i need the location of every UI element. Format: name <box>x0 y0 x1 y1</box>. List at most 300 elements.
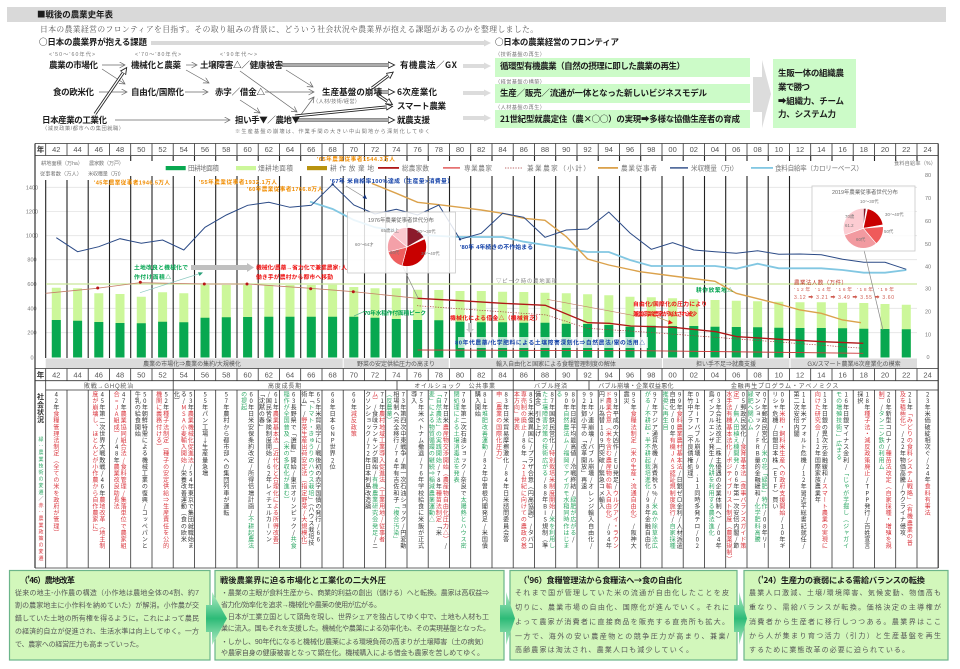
top year header: 08 <box>753 145 762 154</box>
heading: issues: ○日本の農業界が抱える課題 <box>39 36 147 48</box>
pie: 2019 farm worker age distribution: 2019年農業従事者世代分布 <box>832 188 899 196</box>
pie: 1976 farm worker age distribution <box>348 212 456 273</box>
column 1948 <box>113 391 127 549</box>
column 1974 <box>386 391 407 549</box>
lower year header: 60 <box>243 370 252 380</box>
column 1994 <box>598 391 619 549</box>
flow labels: （人材/技術/経営） <box>313 97 360 105</box>
column 1988: た土壌障害対策の技術広がる /88年BIS規制（準 <box>541 391 550 549</box>
legend: 食料自給率（カロリーベース） <box>775 164 863 172</box>
legend <box>166 164 863 172</box>
conclusion box: 生販一体の組織農 <box>778 67 844 79</box>
top year header: 84 <box>498 145 507 154</box>
conclusion box <box>773 59 856 128</box>
chart annotations <box>94 155 894 346</box>
column 1990 <box>556 391 577 549</box>
flow labels: 6次産業化 <box>397 86 437 98</box>
lower year header: 62 <box>265 370 273 380</box>
bottom panel: market and industrial pressure: 業に流入。国もそれを支援した。機械化や農薬による効率化も、その実現基盤となった。 <box>221 624 490 632</box>
top year header: 74 <box>392 145 400 154</box>
chart annotations: 土地改良と機械化で <box>134 264 188 272</box>
column 1984 <box>496 391 510 543</box>
column 1972 <box>365 391 386 549</box>
flow labels: 生産基盤の崩壊 <box>322 86 382 98</box>
flow labels: 日本産業の工業化 <box>42 114 107 126</box>
axis captions: 米収穫量（万t） <box>88 170 124 178</box>
economic era row: バブル経済 <box>534 382 568 390</box>
pie: 2019 farm worker age distribution <box>812 186 915 251</box>
column 2000: 自由化/00年 有機JAS認証規制度施行 / 自家採種 <box>668 391 677 549</box>
right axis labels: 30 <box>925 287 931 293</box>
column 2004 <box>708 391 722 549</box>
lower year header: 10 <box>775 370 783 380</box>
column 2018 <box>857 391 871 549</box>
left axis labels: 1000 <box>26 234 38 240</box>
peak farmland line <box>46 283 917 285</box>
column 2002 <box>687 391 701 549</box>
top year header: 44 <box>73 145 82 154</box>
right axis labels: 80 <box>925 173 931 179</box>
title band: ■戦後の農業史年表 <box>37 8 113 20</box>
top year header: 64 <box>286 145 294 154</box>
top year header: 年 <box>37 144 45 154</box>
chevron arrows between panels <box>206 592 747 645</box>
top year header: 92 <box>583 145 592 154</box>
flow labels: スマート農業 <box>397 100 446 112</box>
bottom panel: 1996 food law: 一方で、海外の安い農産物との競争圧力が高まり、兼業/ <box>515 632 729 640</box>
chart annotations: 農業法人数（万件） <box>794 278 847 286</box>
top year header: 48 <box>116 145 124 154</box>
bottom panel: 1946 land reform: で、農家への経営圧力も高まっていった。 <box>15 639 143 648</box>
top year header: 42 <box>52 145 60 154</box>
lower year header: 88 <box>541 370 549 380</box>
chart annotations: '60年農業従事者1766.8万人 <box>247 185 323 193</box>
top year header: 18 <box>860 145 868 154</box>
era labels: <'70〜'80年代> <box>135 50 181 58</box>
top year header: 78 <box>435 145 443 154</box>
pie: 1976 farm worker age distribution: 1976年農業従事者世代分布 <box>368 216 435 224</box>
lower year header: 18 <box>860 370 868 380</box>
column 2020 <box>878 391 892 549</box>
lower year header: 02 <box>690 370 698 380</box>
top year header: 24 <box>923 145 932 154</box>
top year header: 20 <box>881 145 889 154</box>
column 1954: る/ MSA小麦輸入開始 /栄養改善運動（食の欧米 <box>179 391 188 543</box>
column 2006 <box>726 391 747 563</box>
legend: 耕作放棄地 <box>330 164 374 172</box>
top year header: 94 <box>605 145 613 154</box>
lower year header: 70 <box>350 370 358 380</box>
chart annotations: '80年 4年続きの不作始まる <box>460 243 533 251</box>
teal arrow head <box>198 272 203 276</box>
bottom panel: 1996 food law: （'96）食糧管理法から食糧法へ→食の自由化 <box>519 574 682 586</box>
double arrows <box>95 65 388 120</box>
lower year header: 48 <box>116 370 124 380</box>
top year header: 02 <box>690 145 698 154</box>
top year header: 82 <box>477 145 485 154</box>
flow labels: 機械化と農薬 <box>131 59 181 71</box>
intro text: 日本の農業経営のフロンティアを目指す。その取り組みの背景に、どういう社会状況や農業界が抱える課題があるのかを整理しました。 <box>40 24 538 35</box>
lower year header: 20 <box>881 370 889 380</box>
bottom panel: 1946 land reform: 錯していた土地の所有権を得るように。これによって農民 <box>15 613 199 622</box>
lower year header: 64 <box>286 370 294 380</box>
chart annotations: 作付け面積△ <box>134 273 171 281</box>
left axis labels: 800 <box>27 258 37 264</box>
left axis labels: 0 <box>30 355 34 361</box>
annotation band over bars <box>458 337 648 348</box>
economic era row: 金融再生プログラム・アベノミクス <box>731 382 839 390</box>
big gray arrow <box>753 60 771 128</box>
lower year header: 年 <box>37 370 45 380</box>
lower year header: 74 <box>392 370 400 380</box>
column 1998 <box>644 391 658 549</box>
left axis labels: 600 <box>27 282 37 288</box>
column 1964 <box>283 391 297 549</box>
top year header: 10 <box>775 145 783 154</box>
column 2014 <box>814 391 828 549</box>
column 1988 <box>535 391 556 549</box>
column 2012 <box>793 391 807 549</box>
lower year header: 12 <box>796 370 804 380</box>
top year header: 58 <box>222 145 230 154</box>
bottom panel: 2024 supply and demand: （'24）生産力の衰弱による需給バランスの転換 <box>753 574 925 586</box>
left axis labels: 200 <box>27 331 37 337</box>
legend: 専業農家 <box>464 164 492 172</box>
gray arrow: land improvement <box>191 263 254 272</box>
lower year header: 54 <box>180 370 188 380</box>
lower year header: 92 <box>583 370 592 380</box>
column 1974: 相場制へ完全移行/74年有吉佐和子 「複合汚染」 <box>392 391 401 543</box>
column 1946 <box>92 391 106 549</box>
table grid <box>35 144 938 568</box>
lower year header: 68 <box>328 370 337 380</box>
flow labels: 農業の市場化 <box>49 59 98 71</box>
column 1960 <box>241 391 255 549</box>
lower year header: 04 <box>711 370 719 380</box>
heading: frontier: ○日本の農業経営のフロンティア <box>495 36 619 48</box>
chart annotations: '67年 米自給率100%達成（生産量>消費量） <box>330 177 453 185</box>
top year header: 90 <box>562 145 570 154</box>
column 2008: マンショック/FRB量的金融緩和/ 化学肥料高騰 <box>753 391 762 543</box>
top year header: 56 <box>201 145 209 154</box>
lower year header: 50 <box>137 370 145 380</box>
era labels: <'90年代〜> <box>220 50 257 58</box>
pie: 2019 farm worker age distribution: 70歳 <box>845 213 855 219</box>
top year header: 86 <box>520 145 528 154</box>
economic era row: 高度成長期 <box>268 382 302 390</box>
top year header: 14 <box>817 145 825 154</box>
pie: 2019 farm worker age distribution: 30〜40代 <box>885 211 904 218</box>
frontier boxes: （経営基盤の構築） <box>495 78 545 86</box>
column 1980 <box>453 391 467 549</box>
gray down arrow <box>466 323 474 333</box>
bottom panel: 2024 supply and demand: 重なり、需給バランスが転換。価格決定の主導権が <box>749 602 941 612</box>
right axis labels: 20 <box>925 309 931 315</box>
legend: 米収穫量（万t） <box>691 164 738 172</box>
flow labels: 有機農法／GX <box>400 59 458 71</box>
flow labels: ※生産基盤の崩壊は、作業手間の大きい中山間地から深刻化してゆく <box>235 127 430 135</box>
bottom panel: 2024 supply and demand <box>744 570 948 660</box>
axis captions: 農家数（万戸） <box>89 159 124 167</box>
lower year header: 94 <box>605 370 613 380</box>
column 1954 <box>173 391 194 549</box>
lower year header: 24 <box>923 370 932 380</box>
pie: 1976 farm worker age distribution: 60〜64才 <box>355 241 374 247</box>
top year header: 04 <box>711 145 719 154</box>
thin arrows <box>99 65 314 120</box>
lower year header: 44 <box>73 370 82 380</box>
column 2000 <box>662 391 683 549</box>
data markers <box>96 281 355 293</box>
top year header: 66 <box>307 145 315 154</box>
left axis labels <box>26 185 38 361</box>
lower year header: 42 <box>52 370 60 380</box>
column 2008 <box>747 391 768 549</box>
lower year header: 98 <box>647 370 655 380</box>
chart annotations: 80年代農薬/化学肥料による土壌障害深刻化⇒自然農法/雷の活用△ <box>455 338 645 346</box>
pie: 1976 farm worker age distribution: 50代 <box>390 249 400 256</box>
frontier boxes: （技術基盤の再生） <box>495 50 545 58</box>
lower year header: 80 <box>456 370 464 380</box>
bottom panel: 1996 food law: 切りに、農業市場の自由化、国際化が進んでいく。それに <box>515 602 729 612</box>
line: food self-sufficiency <box>310 202 906 273</box>
lower year header: 72 <box>371 370 379 380</box>
top year header: 52 <box>158 145 167 154</box>
right axis labels: 50 <box>925 242 931 248</box>
bottom panel: 1946 land reform: 従来の地主-小作農の構造（小作地は農地全体の4割、約7 <box>15 588 199 597</box>
era strip: 農業の市場化⇒農業の集約/大規模化 <box>143 360 241 368</box>
leader lines <box>140 186 883 330</box>
top year header: 70 <box>350 145 358 154</box>
pie: 2019 farm worker age distribution: 50代 <box>884 228 894 235</box>
line: rice yield <box>56 184 906 269</box>
frontier boxes: 生産／販売／流通が一体となった新しいビジネスモデル <box>500 87 707 99</box>
bottom panel: market and industrial pressure: ・日本が工業立国として頭角を現し、世界シェアを独占してゆく中で、土地も人材も工 <box>221 612 489 621</box>
column 2010 <box>772 391 786 549</box>
line: secondary trend <box>547 299 640 317</box>
left axis labels: 1200 <box>26 210 38 216</box>
era strip: 輸入自由化と国家による食糧管理制度の解体 <box>496 360 616 368</box>
bottom panel: 1946 land reform: 割の農家地主に小作料を納めていた）が解消。小作農が交 <box>15 601 199 610</box>
line: total farm households <box>46 283 863 343</box>
right axis labels: 40 <box>925 265 931 271</box>
heading arrow <box>151 40 491 46</box>
bottom panel: 1996 food law: 高齢農家は淘汰され、農業人口も減少していく。 <box>515 645 693 654</box>
bottom panel: market and industrial pressure: ・農業の主眼が食料生産から、商業的利益の創出（儲ける）へと転換。農家は高収益⇒ <box>221 588 489 597</box>
bottom panel: 2024 supply and demand: するために業態改革の必要に迫られている。 <box>749 645 909 654</box>
flow labels: 赤字／借金△ <box>215 86 265 98</box>
bottom panel: 1996 food law: それまで国が管理していた米の流通が自由化したことを皮 <box>515 588 729 597</box>
economic era row: 敗戦→GHQ統治 <box>84 382 134 390</box>
column 1966 <box>301 391 322 549</box>
lower year header: 00 <box>668 370 677 380</box>
lower year header: 76 <box>413 370 422 380</box>
era strip: GX/スマート農業/6次産業化の模索 <box>807 360 901 368</box>
lower year header: 22 <box>902 370 910 380</box>
title band <box>7 7 946 22</box>
bottom panel: market and industrial pressure <box>215 570 504 660</box>
axis captions <box>40 159 936 178</box>
column 2022 <box>896 391 917 567</box>
lower year header: 06 <box>732 370 740 380</box>
top year header: 88 <box>541 145 549 154</box>
top year header: 76 <box>413 145 422 154</box>
era strip: 担い手不足⇒就農支援 <box>696 360 756 368</box>
chart annotations: 耕作放棄地△ <box>696 286 733 294</box>
conclusion box: 力、システム力 <box>778 108 836 120</box>
bottom panel: 1946 land reform <box>10 570 210 660</box>
column 1976 <box>411 391 425 549</box>
legend: 兼業農家（小計） <box>527 164 590 172</box>
column 1990: 90年 自然農法ム/福岡でアイガモ水稲同時作はじま <box>562 391 571 549</box>
lower year header: 46 <box>95 370 103 380</box>
chart annotations: 3.12 ➡ 3.21 ➡ 3.49 ➡ 3.55 ➡ 3.60 <box>794 295 894 301</box>
top year header: 00 <box>668 145 677 154</box>
column 1950 <box>134 391 148 549</box>
chart annotations: ▽ピーク時の農地面積 <box>496 277 558 285</box>
frontier boxes: 循環型有機農業（自然の摂理に即した農業の再生） <box>500 60 685 72</box>
top year header: 16 <box>838 145 847 154</box>
conclusion box: 業で勝つ <box>778 81 810 93</box>
era labels <box>49 50 257 58</box>
legend: 農業従事者 <box>621 164 657 172</box>
chart annotations: '65年農業従事者1544.3万人 <box>317 155 395 163</box>
bottom panel: 1996 food law <box>510 570 737 660</box>
lower year header: 08 <box>753 370 762 380</box>
lower year header: 84 <box>498 370 507 380</box>
pie: 2019 farm worker age distribution: 61.2 <box>845 223 854 228</box>
axis captions: 耕地面積（万ha） <box>41 159 83 167</box>
flow labels: 就農支援 <box>397 114 430 126</box>
lower year header <box>37 370 932 380</box>
left axis labels: 400 <box>27 306 37 312</box>
top year header: 72 <box>371 145 379 154</box>
flow labels: 自由化/国際化 <box>131 86 184 98</box>
era strip: 野菜の安定供給圧力の高まり <box>357 360 435 368</box>
arrows to frontier <box>463 62 491 122</box>
row heading: social conditions: 社会状況 緑：農業技術の変遷 ／ 赤：農業政策の変遷 <box>36 393 46 562</box>
lower year header: 78 <box>435 370 443 380</box>
chart annotations: 機械化/農薬→省力化で兼業農家↑人 <box>256 264 347 272</box>
chart annotations: 働き手が農村から都市へ移動 <box>256 273 333 281</box>
lower year header: 58 <box>222 370 230 380</box>
lower year header: 14 <box>817 370 825 380</box>
rice markers <box>332 183 461 240</box>
axis captions: 従事者数（万人） <box>40 170 82 178</box>
bottom panel: market and industrial pressure: 戦後農業界に迫る市場化と工業化の二大外圧 <box>220 574 386 586</box>
economic era row: オイルショック 公共事業 <box>414 382 496 390</box>
era labels: <'50〜'60年代> <box>49 50 95 58</box>
bottom panel: 2024 supply and demand: 消費者から生産者に移行しつつある。農業界はここ <box>749 617 941 626</box>
chart annotations: 機械化による借金△（機械貧乏） <box>450 314 541 322</box>
right axis labels: 0 <box>926 355 930 361</box>
top year header: 22 <box>902 145 910 154</box>
legend: 畑耕地面積 <box>258 164 293 172</box>
legend: 総農家数 <box>402 164 429 172</box>
bottom panel: market and industrial pressure: ・しかし、90年代になると機械化/農薬による環境負荷の高まりが土壌障害（土の病気） <box>221 637 488 646</box>
bottom panel: 1946 land reform: の経済的自立が促進され、生活水準は向上してゆく。一方 <box>15 626 199 635</box>
column 1992 <box>581 391 595 549</box>
top year header: 62 <box>265 145 273 154</box>
flow labels: 担い手▼／農地▼ <box>235 114 300 126</box>
top year header: 80 <box>456 145 464 154</box>
column 1994: ド農業合意（米を含む農産物の輸入自由化） /94年 <box>604 391 613 549</box>
economic era row: バブル崩壊・企業収益悪化 <box>598 382 674 390</box>
column 1972: ム） /食味ランキング開始/ 有機農業研究会発足 /ニ <box>371 391 380 549</box>
frontier boxes: 21世紀型就農定住（農×○○）の実現➡多様な協働生産者の育成 <box>500 113 740 125</box>
top year header: 54 <box>180 145 188 154</box>
lower year header: 90 <box>562 370 570 380</box>
top year header: 12 <box>796 145 804 154</box>
bars: paddy and upland field area <box>56 285 906 358</box>
bottom panel: 1996 food law: よって農家が消費者に直接商品を販売する直売所も拡大。 <box>515 617 729 626</box>
chart annotations: '12年 '14年 '16年 '18年 '19年 <box>794 286 894 293</box>
column 1986: 専売制の廃止 /86年「 21世紀に向けての農政の基 <box>519 391 528 549</box>
axis captions: 食料自給率（%） <box>894 159 936 167</box>
column 1986 <box>513 391 534 549</box>
legend: 田耕地面積 <box>188 164 219 172</box>
axis caption box <box>36 156 130 180</box>
flow labels: 土壌障害△／健康被害 <box>200 59 283 71</box>
top year header: 98 <box>647 145 655 154</box>
lower year header: 86 <box>520 370 528 380</box>
column 2006: 定） / 無人田植え機開発 /06年第一次安倍内閣/節 <box>732 391 741 549</box>
top year header: 60 <box>243 145 252 154</box>
column 2016 <box>836 391 850 549</box>
pie: 2019 farm worker age distribution: 10〜30代 <box>860 198 879 205</box>
lower year header: 96 <box>626 370 634 380</box>
column 1982 <box>474 391 488 549</box>
top year header <box>37 144 932 154</box>
column 1952 <box>156 391 170 549</box>
top year header: 68 <box>328 145 337 154</box>
frontier boxes <box>495 50 750 128</box>
bottom panel: 2024 supply and demand: 農業人口激減、土壌/環境障害、気候変動、物価高も <box>749 588 941 597</box>
chart annotations: '45年農業従事者1946.5万人 <box>94 178 170 186</box>
red arrow <box>657 317 673 324</box>
right axis labels: 60 <box>925 219 931 225</box>
column 1962: /国民皆保険制度開始/62年レイチェルカーソン <box>264 391 273 543</box>
chart annotations: 自由化/国際化の圧力により <box>633 300 707 308</box>
left axis labels: 1400 <box>26 185 38 191</box>
bottom panel: 2024 supply and demand: から人が集まり育つ活力（引力）と生産基盤を再生 <box>749 631 941 640</box>
bottom panel: market and industrial pressure: や農家自身の健康被害となって顕在化。機械購入による借金も農家を苦しめてゆく。 <box>221 648 484 657</box>
conclusion box: ➡組織力、チーム <box>778 95 844 107</box>
flow labels: 食の欧米化 <box>53 86 94 98</box>
column 1978 <box>428 391 449 549</box>
right axis labels <box>925 173 931 361</box>
top year header: 46 <box>95 145 103 154</box>
chart annotations: 兼業/高齢農家が淘汰され減少 <box>633 310 697 318</box>
line: full-time farmers <box>418 350 863 353</box>
pie: 1976 farm worker age distribution: 30〜40代 <box>421 250 440 257</box>
lower year header: 52 <box>158 370 167 380</box>
flow labels: （減反政策/都市への集団就職） <box>42 124 124 132</box>
issues flow diagram <box>42 50 458 135</box>
lower year header: 16 <box>838 370 847 380</box>
chart annotations: '70年水稲作付面積ピーク <box>363 309 426 317</box>
lower year header: 82 <box>477 370 485 380</box>
top year header: 50 <box>137 145 145 154</box>
right axis labels: 70 <box>925 196 931 202</box>
pie: 2019 farm worker age distribution: 60代 <box>856 236 866 243</box>
chart annotations: '55年農業従事者1932.1万人 <box>199 178 277 186</box>
column 1962 <box>258 391 279 549</box>
economic era row <box>84 382 839 390</box>
era strip <box>46 358 917 368</box>
right axis labels: 10 <box>925 332 931 338</box>
pie: 1976 farm worker age distribution: 65歳以上 <box>381 227 400 233</box>
